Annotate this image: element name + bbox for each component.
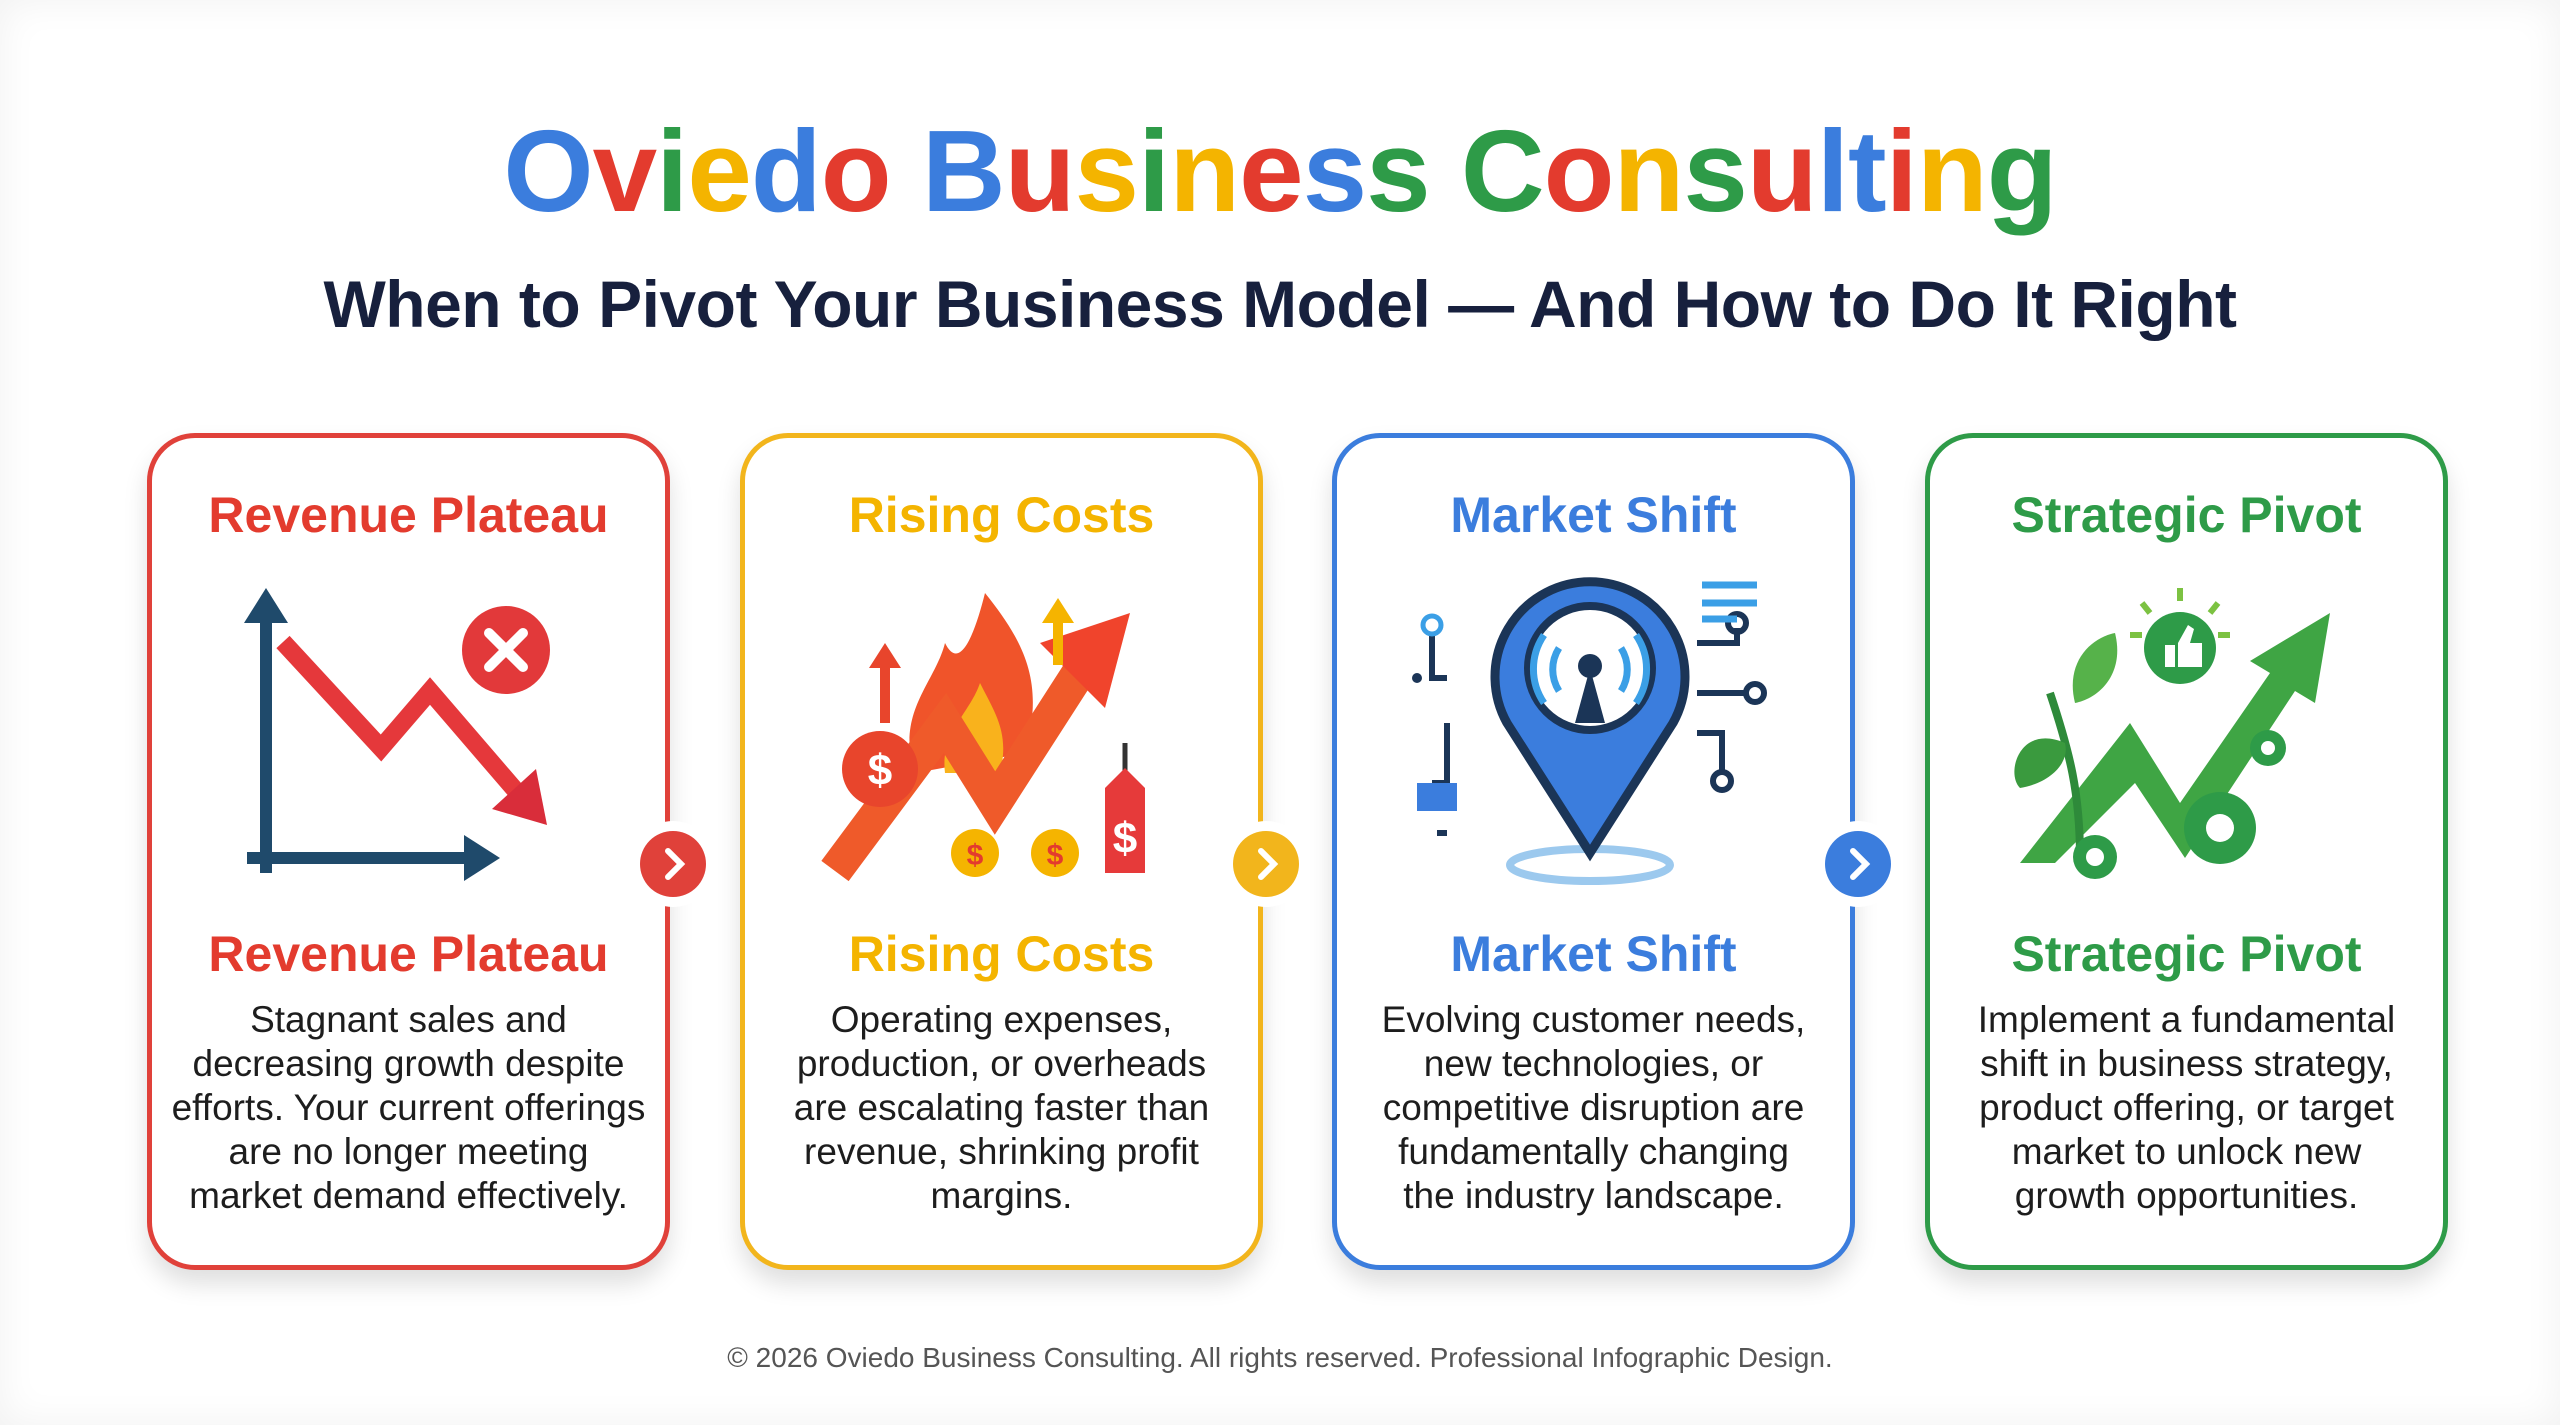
body text: [1382, 999, 1805, 1216]
body text: the industry landscape.: [1403, 1175, 1784, 1216]
body text: product offering, or target: [1979, 1087, 2394, 1128]
body text: market demand effectively.: [189, 1175, 628, 1216]
heading bottom: Revenue Plateau: [208, 926, 609, 982]
heading top: Strategic Pivot: [2011, 487, 2362, 543]
heading bottom: Strategic Pivot: [2011, 926, 2362, 982]
body text: competitive disruption are: [1383, 1087, 1804, 1128]
icon: flame and rising arrow: $: [1113, 814, 1137, 863]
body text: [794, 999, 1209, 1216]
body text: margins.: [931, 1175, 1072, 1216]
icon: location pin with signal: [1412, 577, 1767, 885]
body text: are no longer meeting: [229, 1131, 588, 1172]
icon: flame and rising arrow: $: [1047, 839, 1064, 872]
arrow 1: [630, 821, 716, 907]
body text: growth opportunities.: [2015, 1175, 2358, 1216]
panel: revenue plateau: [147, 433, 670, 1270]
body text: Evolving customer needs,: [1382, 999, 1805, 1040]
body text: shift in business strategy,: [1980, 1043, 2393, 1084]
body text: new technologies, or: [1424, 1043, 1763, 1084]
body text: are escalating faster than: [794, 1087, 1209, 1128]
panel: strategic pivot: [1925, 433, 2448, 1270]
arrow 3: [1815, 821, 1901, 907]
icon: flame and rising arrow: $: [868, 746, 892, 795]
heading top: Market Shift: [1450, 487, 1737, 543]
body text: [1978, 999, 2395, 1216]
body text: revenue, shrinking profit: [804, 1131, 1199, 1172]
body text: decreasing growth despite: [193, 1043, 624, 1084]
panel: market shift: [1332, 433, 1855, 1270]
body text: Operating expenses,: [831, 999, 1172, 1040]
subtitle: When to Pivot Your Business Model — And How to Do It Right: [323, 267, 2237, 341]
title: Oviedo Business Consulting: [503, 106, 2057, 236]
heading bottom: Rising Costs: [849, 926, 1154, 982]
icon: flame and rising arrow: $: [967, 839, 984, 872]
heading bottom: Market Shift: [1450, 926, 1737, 982]
icon: declining chart: [244, 588, 550, 881]
body text: [172, 999, 645, 1216]
body text: Implement a fundamental: [1978, 999, 2395, 1040]
panel: rising costs: [740, 433, 1263, 1270]
body text: Stagnant sales and: [250, 999, 567, 1040]
icon: growth arrow, leaves, gears: [2014, 588, 2330, 879]
body text: market to unlock new: [2012, 1131, 2361, 1172]
body text: efforts. Your current offerings: [172, 1087, 645, 1128]
heading top: Rising Costs: [849, 487, 1154, 543]
arrow 2: [1223, 821, 1309, 907]
icon: flame and rising arrow: [821, 593, 1145, 882]
footer: © 2026 Oviedo Business Consulting. All rights reserved. Professional Infographic Design.: [727, 1342, 1833, 1373]
heading top: Revenue Plateau: [208, 487, 609, 543]
body text: production, or overheads: [797, 1043, 1206, 1084]
body text: fundamentally changing: [1398, 1131, 1789, 1172]
